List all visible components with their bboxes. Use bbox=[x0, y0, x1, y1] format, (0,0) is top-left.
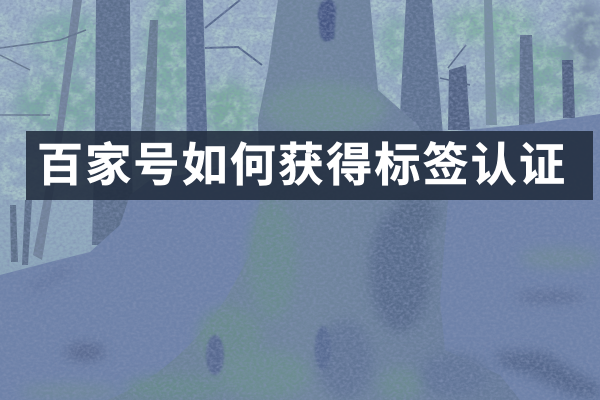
main tree bbox=[107, 0, 520, 400]
foliage bbox=[15, 0, 600, 138]
background trunks and branches bbox=[0, 0, 575, 265]
title banner bbox=[26, 131, 593, 200]
tree hollow bbox=[318, 0, 336, 41]
moss and shadows on the tree bbox=[125, 82, 490, 400]
title text: 百家号如何获得标签认证 bbox=[37, 139, 567, 191]
ground bbox=[0, 114, 600, 400]
